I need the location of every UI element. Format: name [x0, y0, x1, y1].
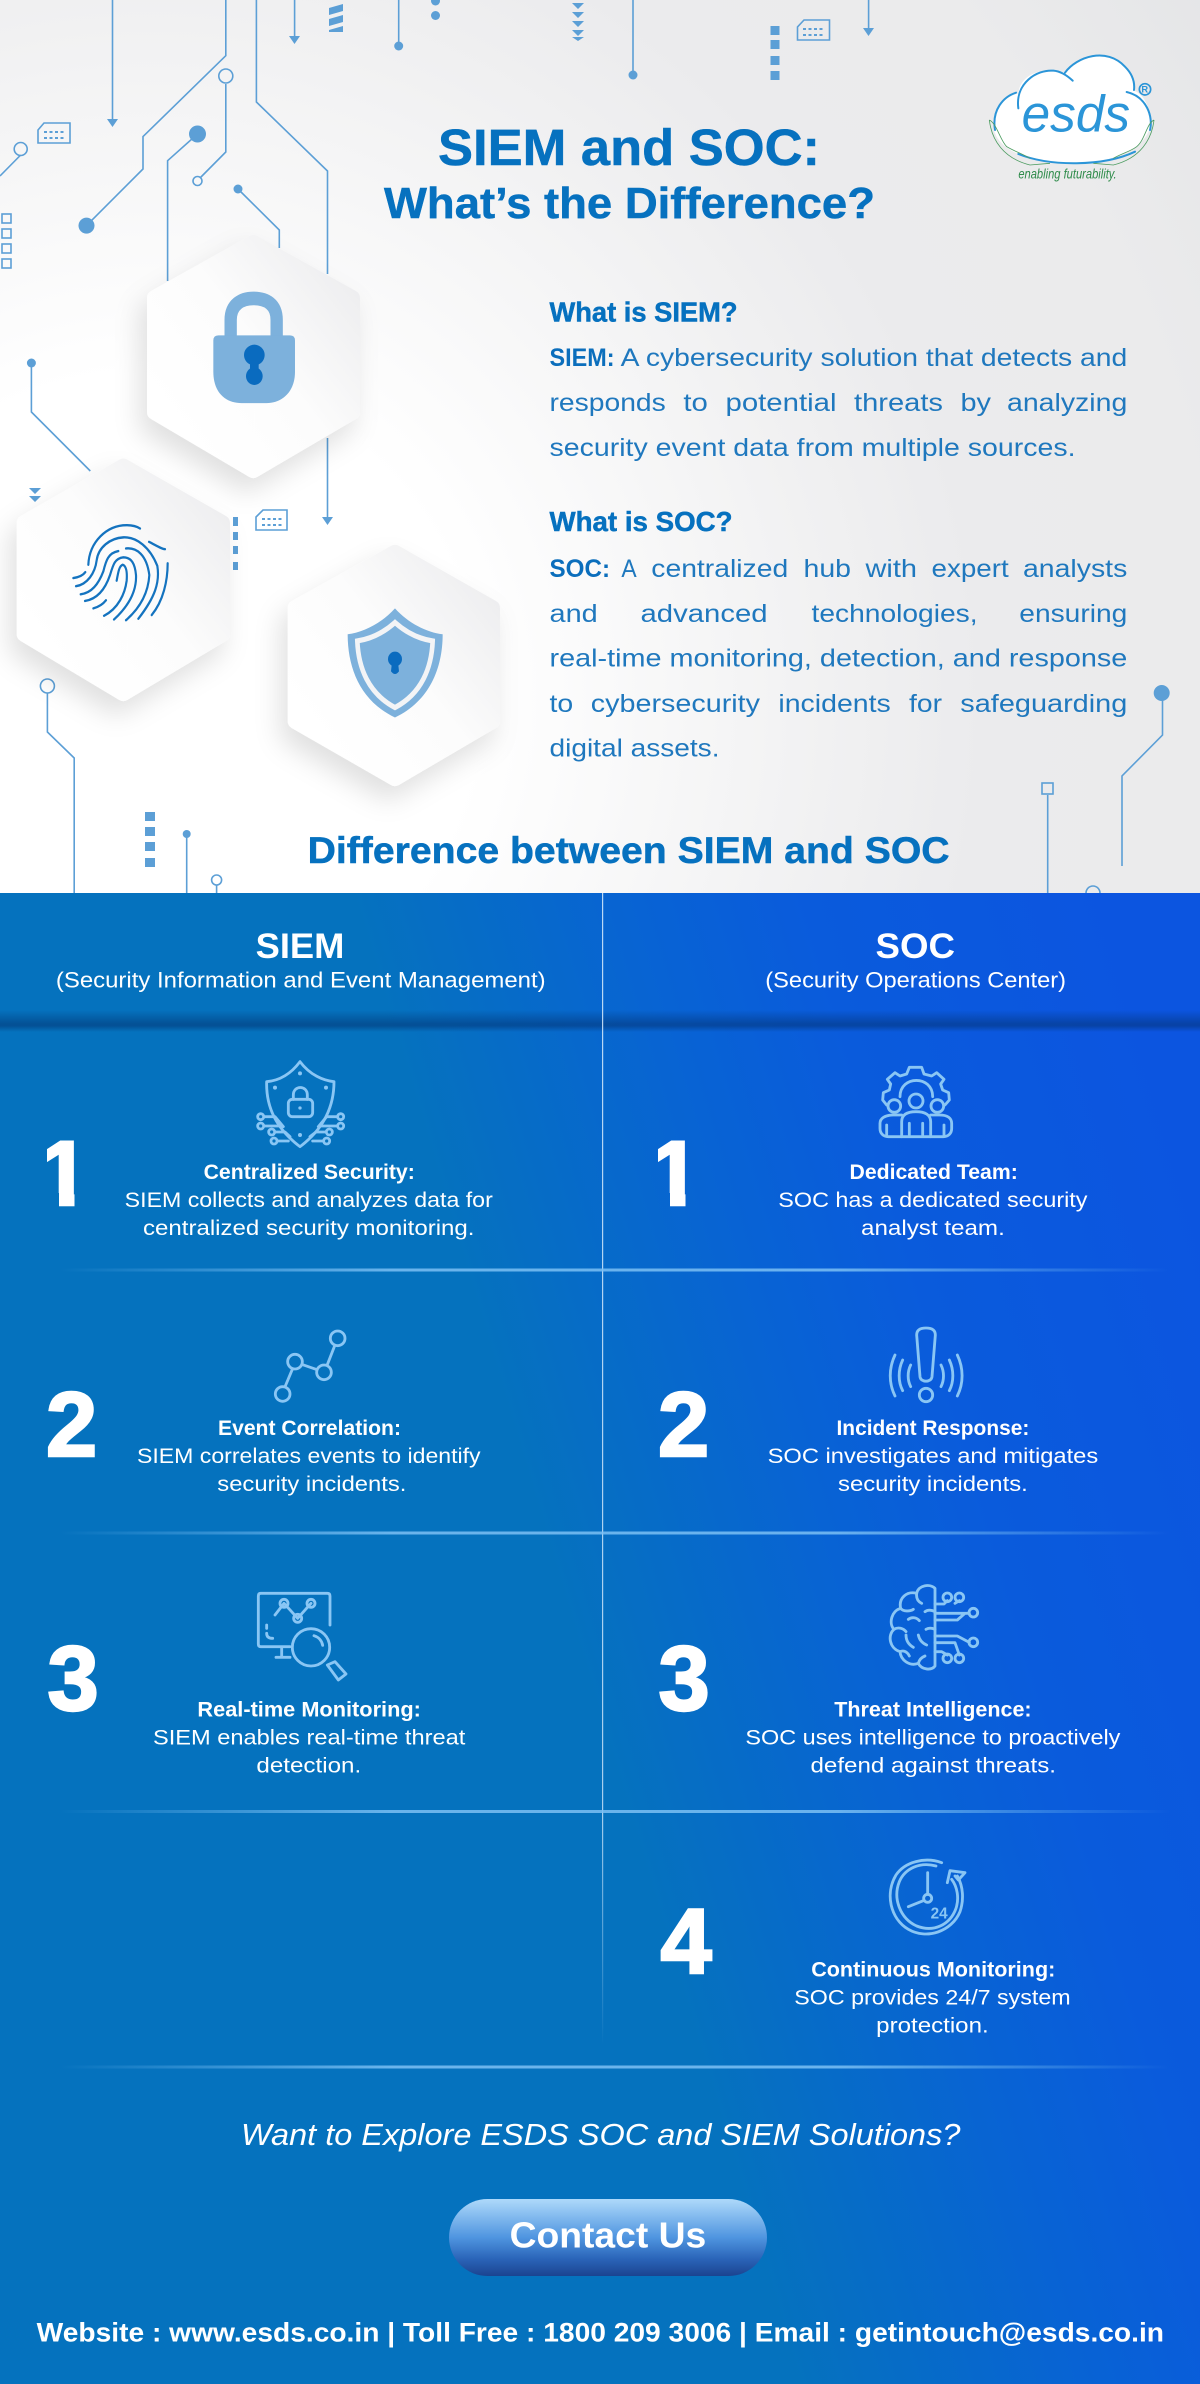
title: What’s the Difference?	[384, 179, 875, 228]
item: SIEM 2 event correlation: security incidents.	[217, 1472, 406, 1496]
text block: what is SOC: A	[621, 555, 637, 583]
item: SOC 4 continuous monitoring	[660, 1860, 1071, 2038]
logo: esds cloud: esds	[1022, 85, 1130, 143]
title: SIEM and SOC:	[438, 119, 820, 176]
text block: what is SOC: safeguarding	[960, 690, 1127, 718]
text block: what is SIEM: to	[683, 389, 708, 417]
text block: what is SIEM: by	[960, 389, 992, 417]
circuit decoration: traces and nodes	[0, 0, 1170, 900]
text block: what is SIEM	[550, 296, 1127, 462]
item: SOC 1 dedicated team: Dedicated Team:	[850, 1160, 1018, 1184]
icon: shield with keyhole	[348, 608, 443, 718]
logo: esds cloud: R	[1141, 85, 1148, 95]
item: SIEM 3 real-time monitoring: 3	[48, 1628, 99, 1730]
item: SIEM 1 centralized security: Centralized Security:	[204, 1160, 415, 1184]
item: SIEM 3 real-time monitoring: detection.	[256, 1754, 361, 1778]
item: SOC 2 incident response	[658, 1328, 1098, 1496]
header: SOC column	[765, 927, 1066, 992]
item: SIEM 2 event correlation: Event Correlation:	[218, 1416, 401, 1440]
hexagon: fingerprint card	[25, 467, 222, 693]
text block: what is SIEM: security event data from multiple sources.	[550, 434, 1076, 462]
table column divider	[602, 893, 603, 2045]
text block: what is SOC: technologies,	[812, 600, 978, 628]
text block: what is SOC: expert	[932, 555, 1009, 583]
text block: what is SOC: hub	[804, 555, 851, 583]
item: SOC 3 threat intelligence: Threat Intelligence:	[834, 1698, 1032, 1722]
item: SOC 3 threat intelligence: 3	[658, 1628, 710, 1730]
header: SIEM column: (Security Information and Event Management)	[56, 968, 546, 992]
icon: 24 hour clock	[890, 1860, 965, 1934]
text block: what is SIEM: What is SIEM?	[550, 296, 738, 328]
text block: what is SOC: incidents	[778, 690, 891, 718]
item: SOC 2 incident response: security incidents.	[838, 1472, 1028, 1496]
icon: correlation graph	[275, 1331, 345, 1401]
item: SIEM 1 centralized security: SIEM collects and analyzes data for	[125, 1188, 493, 1212]
item: SOC 1 dedicated team: 1	[650, 1123, 701, 1225]
row divider 4	[60, 2066, 1170, 2068]
item: SOC 2 incident response: SOC investigates and mitigates	[768, 1444, 1098, 1468]
panel: blue comparison background	[0, 893, 1200, 2384]
item: SIEM 1 centralized security: centralized security monitoring.	[143, 1216, 474, 1240]
icon: 24 hour clock: 24	[931, 1906, 948, 1923]
text block: what is SOC: SOC:	[550, 555, 610, 583]
item: SOC 4 continuous monitoring: SOC provides 24/7 system	[794, 1986, 1071, 2010]
item: SIEM 2 event correlation: SIEM correlates events to identify	[137, 1444, 481, 1468]
item: SOC 3 threat intelligence: SOC uses intelligence to proactively	[745, 1726, 1121, 1750]
button: contact us: Contact Us	[510, 2214, 706, 2256]
text block: what is SOC: real-time monitoring, detection, and response	[550, 644, 1127, 672]
item: SIEM 2 event correlation: 2	[46, 1374, 97, 1476]
text block: what is SOC: ensuring	[1019, 600, 1127, 628]
text block: what is SOC	[550, 506, 1127, 762]
text block: what is SOC: centralized	[651, 555, 788, 583]
title	[384, 119, 875, 228]
text block: what is SOC: for	[909, 690, 942, 718]
icon: circuit shield lock	[258, 1062, 344, 1147]
header: SOC column: SOC	[876, 927, 955, 966]
text block: what is SOC: to	[550, 690, 573, 718]
text block: what is SOC: digital assets.	[550, 734, 720, 762]
item: SOC 4 continuous monitoring: protection.	[876, 2014, 989, 2038]
icon: alert exclamation with waves	[890, 1328, 962, 1402]
row divider 3	[60, 1810, 1170, 1813]
icon: padlock	[213, 298, 295, 403]
item: SOC 2 incident response: Incident Response:	[836, 1416, 1029, 1440]
footer contact line: Website : www.esds.co.in | Toll Free : 1800 209 3006 | Email : getintouch@esds.co.in	[37, 2318, 1164, 2348]
text block: what is SIEM: SIEM:	[550, 344, 614, 372]
item: SIEM 1 centralized security: 1	[38, 1123, 90, 1225]
header: SOC column: (Security Operations Center)	[765, 968, 1066, 992]
table header band shadow	[0, 1010, 1200, 1032]
text block: what is SOC: analysts	[1023, 555, 1127, 583]
text block: what is SOC: advanced	[640, 600, 768, 628]
item: SIEM 3 real-time monitoring	[48, 1593, 465, 1778]
heading: difference between: Difference between SIEM and SOC	[308, 830, 950, 871]
text block: what is SOC: with	[864, 555, 917, 583]
item: SIEM 2 event correlation	[46, 1331, 481, 1496]
hexagon: padlock card	[155, 243, 352, 470]
item: SOC 3 threat intelligence	[658, 1586, 1121, 1778]
item: SIEM 1 centralized security	[38, 1062, 493, 1240]
item: SOC 1 dedicated team: SOC has a dedicated security	[778, 1188, 1088, 1212]
text block: what is SOC: What is SOC?	[550, 506, 732, 537]
header: SIEM column	[56, 927, 546, 992]
row divider 1	[60, 1268, 1170, 1272]
item: SOC 2 incident response: 2	[658, 1374, 709, 1476]
icon: team with gear	[880, 1067, 952, 1137]
item: SOC 1 dedicated team: analyst team.	[861, 1216, 1005, 1240]
item: SIEM 3 real-time monitoring: Real-time Monitoring:	[197, 1698, 421, 1722]
logo: esds cloud	[989, 55, 1154, 181]
panel: light header background	[0, 0, 1200, 895]
item: SOC 4 continuous monitoring: Continuous Monitoring:	[811, 1958, 1055, 1982]
text block: what is SIEM: A cybersecurity solution that detects and	[621, 344, 1127, 372]
icon: monitor with magnifier	[258, 1593, 346, 1680]
call to action question: Want to Explore ESDS SOC and SIEM Solutions?	[241, 2117, 961, 2152]
text block: what is SIEM: analyzing	[1007, 389, 1127, 417]
icon: fingerprint	[73, 525, 168, 620]
item: SOC 1 dedicated team	[650, 1067, 1088, 1240]
item: SOC 4 continuous monitoring: 4	[660, 1891, 712, 1993]
hexagon: shield card	[296, 553, 492, 778]
text block: what is SOC: cybersecurity	[591, 690, 761, 718]
row divider 2	[60, 1532, 1170, 1534]
text block: what is SIEM: responds	[550, 389, 666, 417]
text block: what is SOC: and	[550, 600, 598, 628]
button: contact us	[449, 2199, 767, 2276]
item: SOC 3 threat intelligence: defend against threats.	[810, 1754, 1056, 1778]
header: SIEM column: SIEM	[256, 927, 344, 966]
text block: what is SIEM: threats	[854, 389, 943, 417]
icon: brain with circuits	[890, 1586, 978, 1669]
text block: what is SIEM: potential	[726, 389, 836, 417]
item: SIEM 3 real-time monitoring: SIEM enables real-time threat	[153, 1726, 465, 1750]
logo: esds cloud: enabling futurability.	[1018, 165, 1117, 181]
